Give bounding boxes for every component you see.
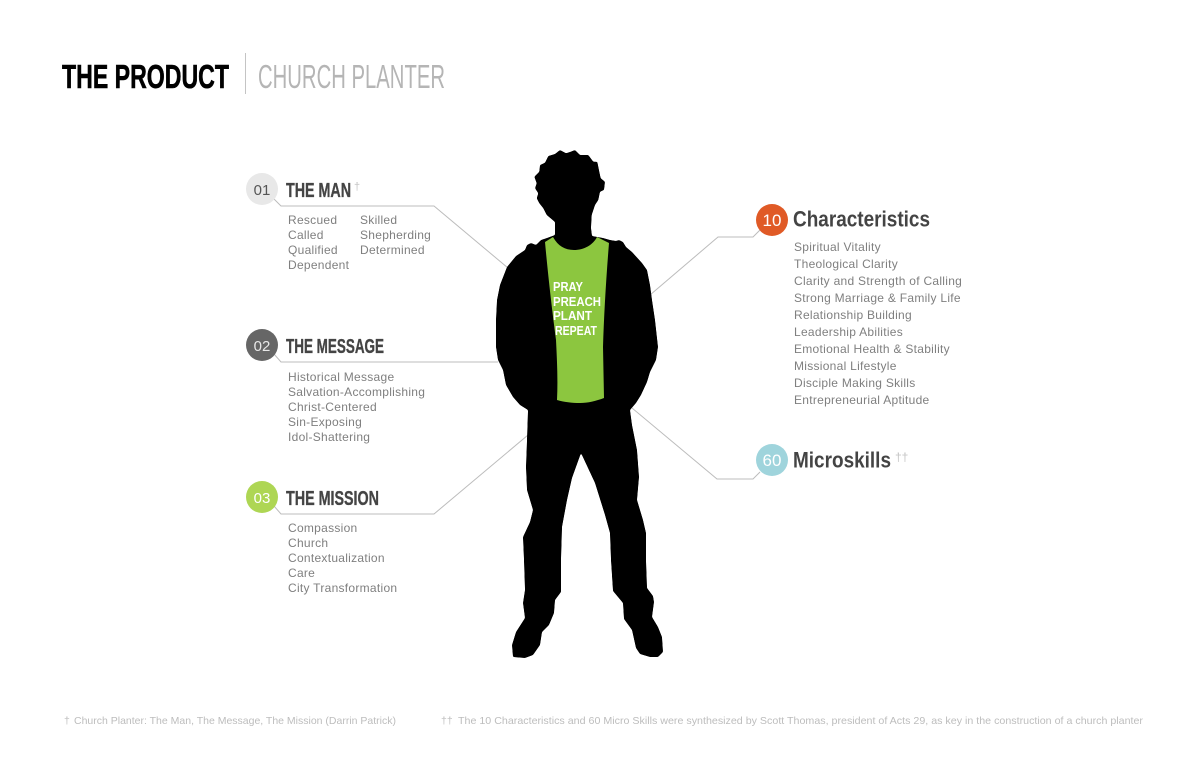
connector: the man: [274, 199, 508, 268]
badge 02: 02: [254, 338, 270, 355]
list: characteristics: Disciple Making Skills: [794, 376, 916, 390]
title: [62, 53, 445, 95]
footnote 2: The 10 Characteristics and 60 Micro Skills were synthesized by Scott Thomas, president of Acts 29, as key in the construction of a church planter: [458, 715, 1144, 727]
badge 60: 60: [763, 451, 781, 470]
list: characteristics: Clarity and Strength of Calling: [794, 274, 962, 288]
list: the mission: Compassion: [288, 521, 358, 535]
footnote 1: †: [64, 715, 70, 727]
list: the man: Dependent: [288, 258, 350, 272]
list: the mission: Care: [288, 566, 315, 580]
footnote 2: ††: [441, 715, 453, 727]
title: CHURCH PLANTER: [258, 58, 445, 95]
dagger: †: [354, 181, 360, 193]
list: the mission: [288, 521, 397, 595]
list: the man: [288, 213, 431, 272]
heading: characteristics: Characteristics: [793, 206, 930, 232]
t-shirt text: REPEAT: [555, 323, 597, 338]
list: the message: [288, 370, 425, 444]
connector: the mission: [274, 435, 528, 514]
heading: the mission: THE MISSION: [286, 488, 379, 510]
badge 03: [246, 481, 278, 513]
t-shirt text: PRAY: [553, 279, 583, 294]
t-shirt text: PREACH: [553, 294, 601, 309]
section: microskills: [756, 444, 908, 476]
badge 10: [756, 204, 788, 236]
t-shirt text: PLANT: [553, 308, 592, 323]
title: THE PRODUCT: [62, 58, 229, 95]
list: the man: Determined: [360, 243, 425, 257]
list: the message: Idol-Shattering: [288, 430, 370, 444]
section: the mission: [246, 481, 397, 595]
list: characteristics: Theological Clarity: [794, 257, 898, 271]
list: the man: Qualified: [288, 243, 338, 257]
badge 10: 10: [763, 211, 781, 230]
list: characteristics: Leadership Abilities: [794, 325, 903, 339]
list: the man: Rescued: [288, 213, 337, 227]
badge 60: [756, 444, 788, 476]
list: the man: Skilled: [360, 213, 397, 227]
t-shirt: [545, 237, 609, 403]
section: the man: [246, 173, 431, 272]
list: the man: Shepherding: [360, 228, 431, 242]
list: characteristics: Missional Lifestyle: [794, 359, 897, 373]
connector: characteristics: [650, 230, 760, 295]
badge 01: 01: [254, 182, 270, 199]
badge 01: [246, 173, 278, 205]
list: the man: Called: [288, 228, 324, 242]
footnote 1: Church Planter: The Man, The Message, The Mission (Darrin Patrick): [74, 715, 396, 727]
list: the mission: City Transformation: [288, 581, 397, 595]
section: the message: [246, 329, 425, 444]
list: the mission: Church: [288, 536, 328, 550]
section: characteristics: [756, 204, 962, 407]
badge 02: [246, 329, 278, 361]
list: characteristics: Entrepreneurial Aptitude: [794, 393, 930, 407]
silhouette figure: [496, 150, 663, 658]
list: characteristics: [794, 240, 962, 407]
list: the message: Sin-Exposing: [288, 415, 362, 429]
heading: the message: THE MESSAGE: [286, 336, 384, 358]
silhouette body: [496, 150, 663, 658]
t-shirt text: [553, 279, 601, 338]
list: characteristics: Relationship Building: [794, 308, 912, 322]
heading: the man: THE MAN: [286, 180, 351, 202]
double dagger: ††: [895, 450, 908, 464]
list: the mission: Contextualization: [288, 551, 385, 565]
list: the message: Christ-Centered: [288, 400, 377, 414]
connector: the message: [274, 354, 498, 362]
list: characteristics: Emotional Health & Stability: [794, 342, 950, 356]
list: the message: Historical Message: [288, 370, 394, 384]
heading: microskills: Microskills: [793, 448, 891, 472]
badge 03: 03: [254, 490, 270, 507]
list: the message: Salvation-Accomplishing: [288, 385, 425, 399]
list: characteristics: Spiritual Vitality: [794, 240, 881, 254]
connector: microskills: [632, 408, 760, 479]
list: characteristics: Strong Marriage & Family Life: [794, 291, 961, 305]
